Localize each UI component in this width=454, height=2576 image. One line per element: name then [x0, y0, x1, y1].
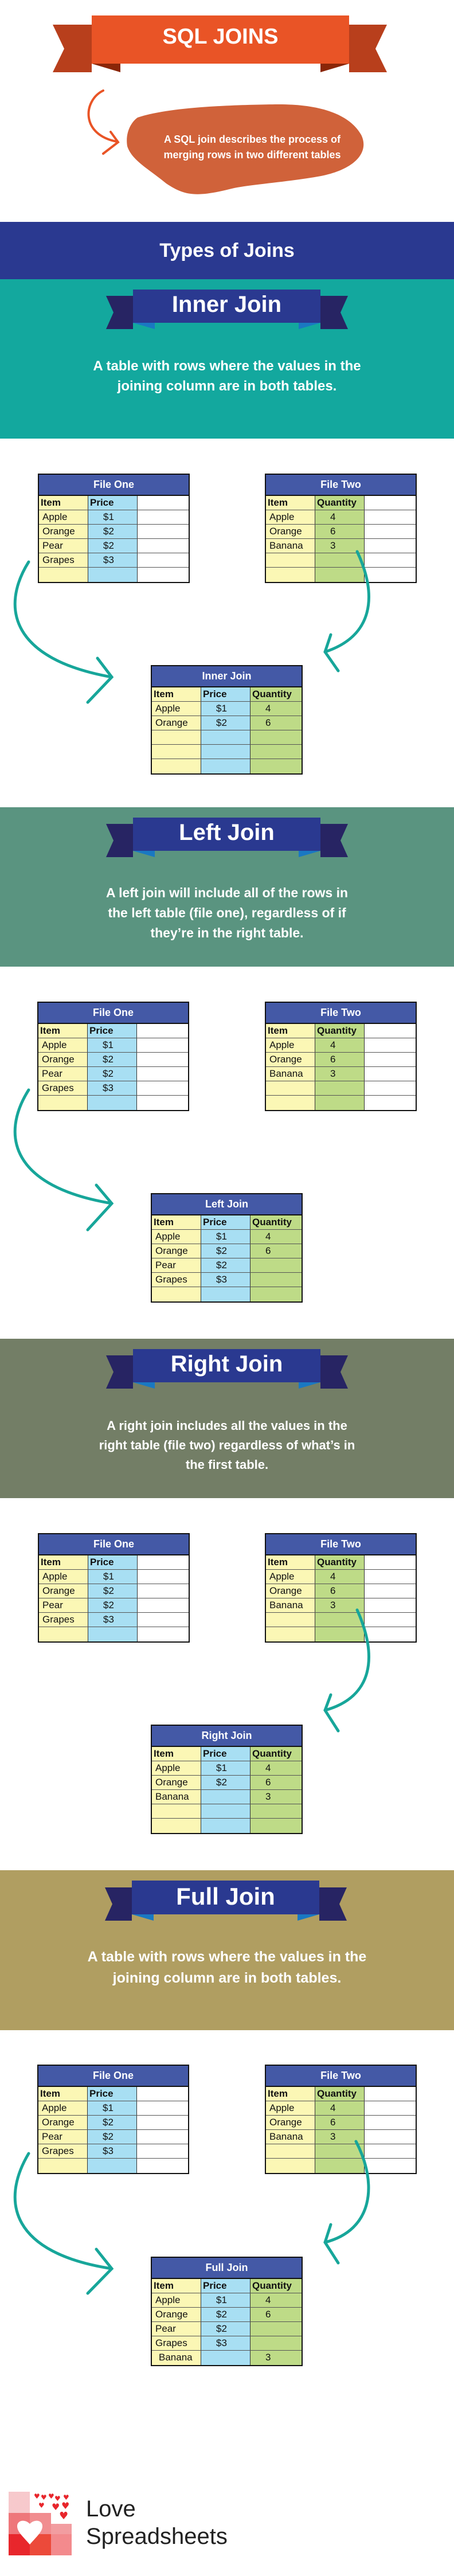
description: the first table.: [186, 1457, 268, 1472]
table: full file one: Apple: [42, 2102, 66, 2113]
table: right join result: [151, 1725, 303, 1834]
ribbon: Left Join: [106, 818, 348, 857]
description: right table (file two) regardless of what’s in: [99, 1438, 355, 1452]
table: left join result: Price: [203, 1217, 227, 1228]
table: inner file two: Item: [268, 497, 288, 508]
table: left file two: Item: [268, 1025, 288, 1036]
table: inner join result: Price: [203, 689, 227, 699]
icon: logo squares with heart: ♥: [38, 2501, 45, 2509]
table: right file two: 4: [330, 1571, 335, 1582]
table: right join result: $2: [216, 1777, 227, 1788]
table: full join result: Quantity: [252, 2280, 292, 2291]
description: [99, 1418, 355, 1472]
table: full file two: Orange: [269, 2117, 302, 2128]
table: right file one: Apple: [42, 1571, 67, 1582]
table: inner join result: $1: [216, 703, 227, 714]
table: inner file one: $1: [103, 511, 114, 522]
table: inner file two: 4: [330, 511, 335, 522]
table: right file two: Quantity: [317, 1557, 357, 1568]
table: right file one: File One: [93, 1538, 134, 1550]
arrows: full join: [14, 2140, 370, 2294]
ribbon: Full Join: [105, 1881, 347, 1921]
panel: full join: [0, 1870, 454, 2030]
table: left file one: Grapes: [42, 1082, 74, 1093]
table: left join result: $1: [216, 1231, 227, 1242]
table: full file two: Banana: [269, 2131, 303, 2142]
table: inner join result: $2: [216, 717, 227, 728]
table: left join result: Grapes: [155, 1274, 187, 1285]
table: inner join result: Quantity: [252, 689, 292, 699]
arrows: inner join: [14, 550, 370, 704]
panel: inner join: [0, 279, 454, 439]
table: full join result: Price: [203, 2280, 227, 2291]
table: full join result: $3: [216, 2337, 227, 2348]
table: inner file two: File Two: [320, 479, 361, 490]
logo: Love Spreadsheets: Spreadsheets: [86, 2524, 228, 2549]
icon: logo squares with heart: ♥: [54, 2495, 61, 2503]
table: inner join result: Orange: [155, 717, 188, 728]
table: left file two: Orange: [269, 1054, 302, 1065]
description: A table with rows where the values in the: [88, 1949, 366, 1965]
table: left file two: 4: [330, 1039, 335, 1050]
table: left join result: Orange: [155, 1245, 188, 1256]
table: inner file one: Pear: [42, 540, 63, 551]
table: right join result: Price: [203, 1748, 227, 1759]
table: left file two: Banana: [269, 1068, 303, 1079]
table: right file two: Item: [268, 1557, 288, 1568]
table: left join result: 6: [265, 1245, 271, 1256]
ribbon: Full Join: Full Join: [176, 1883, 275, 1910]
description: [93, 358, 361, 394]
table: full file two: Quantity: [317, 2088, 357, 2099]
logo: Love Spreadsheets: Love: [86, 2496, 136, 2522]
table: left join result: Left Join: [205, 1198, 248, 1210]
icon: logo squares with heart: ♥: [52, 2501, 60, 2512]
table: full file one: $3: [103, 2145, 114, 2156]
table: left file two: Apple: [269, 1039, 294, 1050]
table: right join result: 4: [265, 1762, 271, 1773]
table: full file one: Orange: [42, 2117, 75, 2128]
table: left file one: Price: [89, 1025, 114, 1036]
icon: logo squares with heart: [9, 2492, 72, 2555]
table: full file two: Apple: [269, 2102, 294, 2113]
ribbon: Left Join: Left Join: [179, 820, 275, 845]
table: right file two: 3: [330, 1600, 335, 1611]
table: full join result: Full Join: [205, 2262, 248, 2273]
table: left file two: 3: [330, 1068, 335, 1079]
table: right file two: Apple: [269, 1571, 294, 1582]
panel: left join: [0, 807, 454, 967]
description: joining column are in both tables.: [118, 378, 336, 394]
table: full file two: File Two: [320, 2070, 361, 2081]
table: right file one: Grapes: [42, 1614, 75, 1625]
description: A left join will include all of the rows in: [106, 885, 348, 900]
table: full join result: Item: [154, 2280, 174, 2291]
table: inner join result: Apple: [155, 703, 180, 714]
table: right file two: 6: [330, 1585, 335, 1596]
table: right join result: 6: [265, 1777, 271, 1788]
table: right file one: Orange: [42, 1585, 75, 1596]
table: full file two: 6: [330, 2117, 335, 2128]
table: full file two: Item: [268, 2088, 288, 2099]
table: full join result: Apple: [155, 2294, 180, 2305]
table: right join result: Orange: [155, 1777, 188, 1788]
table: left file two: 6: [330, 1054, 335, 1065]
table: right file two: Banana: [269, 1600, 303, 1611]
table: left file two: [265, 1002, 417, 1111]
table: right file two: Orange: [269, 1585, 302, 1596]
icon: logo squares with heart: ♥: [34, 2492, 40, 2500]
table: full join result: $1: [216, 2294, 227, 2305]
icon: logo squares with heart: ♥: [59, 2510, 68, 2522]
table: full join result: $2: [216, 2323, 227, 2334]
table: right join result: Right Join: [202, 1730, 252, 1741]
callout: definition blob: A SQL join describes the process of: [164, 134, 340, 145]
table: full file one: $1: [103, 2102, 114, 2113]
table: right join result: Quantity: [252, 1748, 292, 1759]
table: full join result: Orange: [155, 2309, 188, 2320]
table: left join result: 4: [265, 1231, 271, 1242]
table: left join result: Apple: [155, 1231, 180, 1242]
table: full file one: [37, 2065, 189, 2174]
arrow: right join: [323, 1609, 370, 1733]
table: left file one: Pear: [42, 1068, 62, 1079]
icon: orange curved arrow: [87, 89, 120, 155]
table: inner file one: Apple: [42, 511, 67, 522]
table: left join result: $2: [216, 1260, 227, 1271]
table: full join result: Grapes: [155, 2337, 187, 2348]
table: full join result: $2: [216, 2309, 227, 2320]
table: left file one: File One: [93, 1007, 134, 1018]
callout: definition blob: merging rows in two different tables: [163, 149, 341, 161]
table: inner file two: Quantity: [317, 497, 357, 508]
table: left file one: $1: [103, 1039, 114, 1050]
description: joining column are in both tables.: [113, 1970, 341, 1986]
table: left file one: Orange: [42, 1054, 75, 1065]
panel: right join: [0, 1339, 454, 1498]
table: inner file one: File One: [93, 479, 134, 490]
table: full file one: $2: [103, 2117, 114, 2128]
table: right file one: Price: [90, 1557, 114, 1568]
table: right file one: [38, 1533, 190, 1643]
table: inner file one: Orange: [42, 526, 75, 537]
table: inner file two: Orange: [269, 526, 302, 537]
table: inner file two: Apple: [269, 511, 294, 522]
icon: logo squares with heart: ♥: [41, 2493, 47, 2501]
table: inner file two: Banana: [269, 540, 303, 551]
ribbon: Right Join: Right Join: [171, 1351, 283, 1377]
table: inner join result: 4: [265, 703, 271, 714]
table: left join result: $2: [216, 1245, 227, 1256]
table: inner file two: 3: [330, 540, 335, 551]
table: full file one: Grapes: [42, 2145, 74, 2156]
table: full join result: 3: [265, 2352, 271, 2363]
table: left file one: $2: [103, 1054, 114, 1065]
table: left file one: [37, 1002, 189, 1111]
table: full join result: [151, 2257, 303, 2366]
table: inner join result: [151, 665, 303, 775]
callout: definition blob: [127, 104, 363, 194]
ribbon: Right Join: [106, 1349, 348, 1389]
description: the left table (file one), regardless of if: [108, 905, 346, 920]
icon: logo squares with heart: ♥: [63, 2493, 69, 2501]
logo: Love Spreadsheets: [9, 2492, 228, 2555]
description: [106, 885, 348, 940]
table: left join result: Item: [154, 1217, 174, 1228]
ribbon: Inner Join: [106, 290, 348, 329]
table: left file two: File Two: [320, 1007, 361, 1018]
table: inner file two: 6: [330, 526, 335, 537]
table: right file one: $1: [103, 1571, 114, 1582]
table: inner file one: Item: [41, 497, 61, 508]
table: inner file two: [265, 474, 417, 583]
table: left file one: Item: [40, 1025, 60, 1036]
table: inner join result: Item: [154, 689, 174, 699]
arrow: left join: [14, 1088, 114, 1232]
table: inner file one: [38, 474, 190, 583]
table: full join result: 6: [265, 2309, 271, 2320]
heading: Types of Joins: Types of Joins: [159, 240, 295, 261]
description: they’re in the right table.: [150, 925, 304, 940]
table: full file one: $2: [103, 2131, 114, 2142]
table: inner file one: $2: [103, 526, 114, 537]
table: inner file one: Price: [90, 497, 114, 508]
ribbon: Inner Join: Inner Join: [172, 292, 281, 317]
table: right join result: $1: [216, 1762, 227, 1773]
description: [88, 1949, 366, 1986]
table: right file one: Item: [41, 1557, 61, 1568]
table: right file one: $2: [103, 1585, 114, 1596]
table: right file one: $2: [103, 1600, 114, 1611]
table: inner file one: $2: [103, 540, 114, 551]
table: full join result: 4: [265, 2294, 271, 2305]
table: right join result: Banana: [155, 1791, 189, 1802]
table: right join result: Apple: [155, 1762, 180, 1773]
table: right file two: File Two: [320, 1538, 361, 1550]
table: left join result: [151, 1193, 303, 1303]
table: full file two: 4: [330, 2102, 335, 2113]
table: full file one: Price: [89, 2088, 114, 2099]
table: left file one: $2: [103, 1068, 114, 1079]
heading: Types of Joins: [0, 222, 454, 279]
table: left join result: Quantity: [252, 1217, 292, 1228]
table: full file one: Pear: [42, 2131, 62, 2142]
table: full join result: Pear: [155, 2323, 176, 2334]
table: left file one: Apple: [42, 1039, 66, 1050]
table: inner file one: $3: [103, 554, 114, 565]
table: right join result: 3: [265, 1791, 271, 1802]
table: right file one: $3: [103, 1614, 114, 1625]
table: left file two: Quantity: [317, 1025, 357, 1036]
table: full file two: [265, 2065, 417, 2174]
table: inner join result: Inner Join: [202, 670, 251, 682]
table: inner join result: 6: [265, 717, 271, 728]
title ribbon: [53, 15, 387, 72]
title ribbon: SQL JOINS: [162, 25, 279, 49]
description: A table with rows where the values in the: [93, 358, 361, 374]
table: left file one: $3: [103, 1082, 114, 1093]
table: left join result: Pear: [155, 1260, 176, 1271]
icon: logo squares with heart: ♥: [61, 2500, 69, 2511]
icon: logo squares with heart: ♥: [48, 2492, 54, 2500]
table: full file one: Item: [40, 2088, 60, 2099]
description: A right join includes all the values in the: [107, 1418, 347, 1433]
table: inner file one: Grapes: [42, 554, 75, 565]
table: left join result: $3: [216, 1274, 227, 1285]
table: right file two: [265, 1533, 417, 1643]
table: full join result: Banana: [159, 2352, 193, 2363]
table: right join result: Item: [154, 1748, 174, 1759]
table: full file one: File One: [93, 2070, 134, 2081]
table: full file two: 3: [330, 2131, 335, 2142]
table: right file one: Pear: [42, 1600, 63, 1611]
